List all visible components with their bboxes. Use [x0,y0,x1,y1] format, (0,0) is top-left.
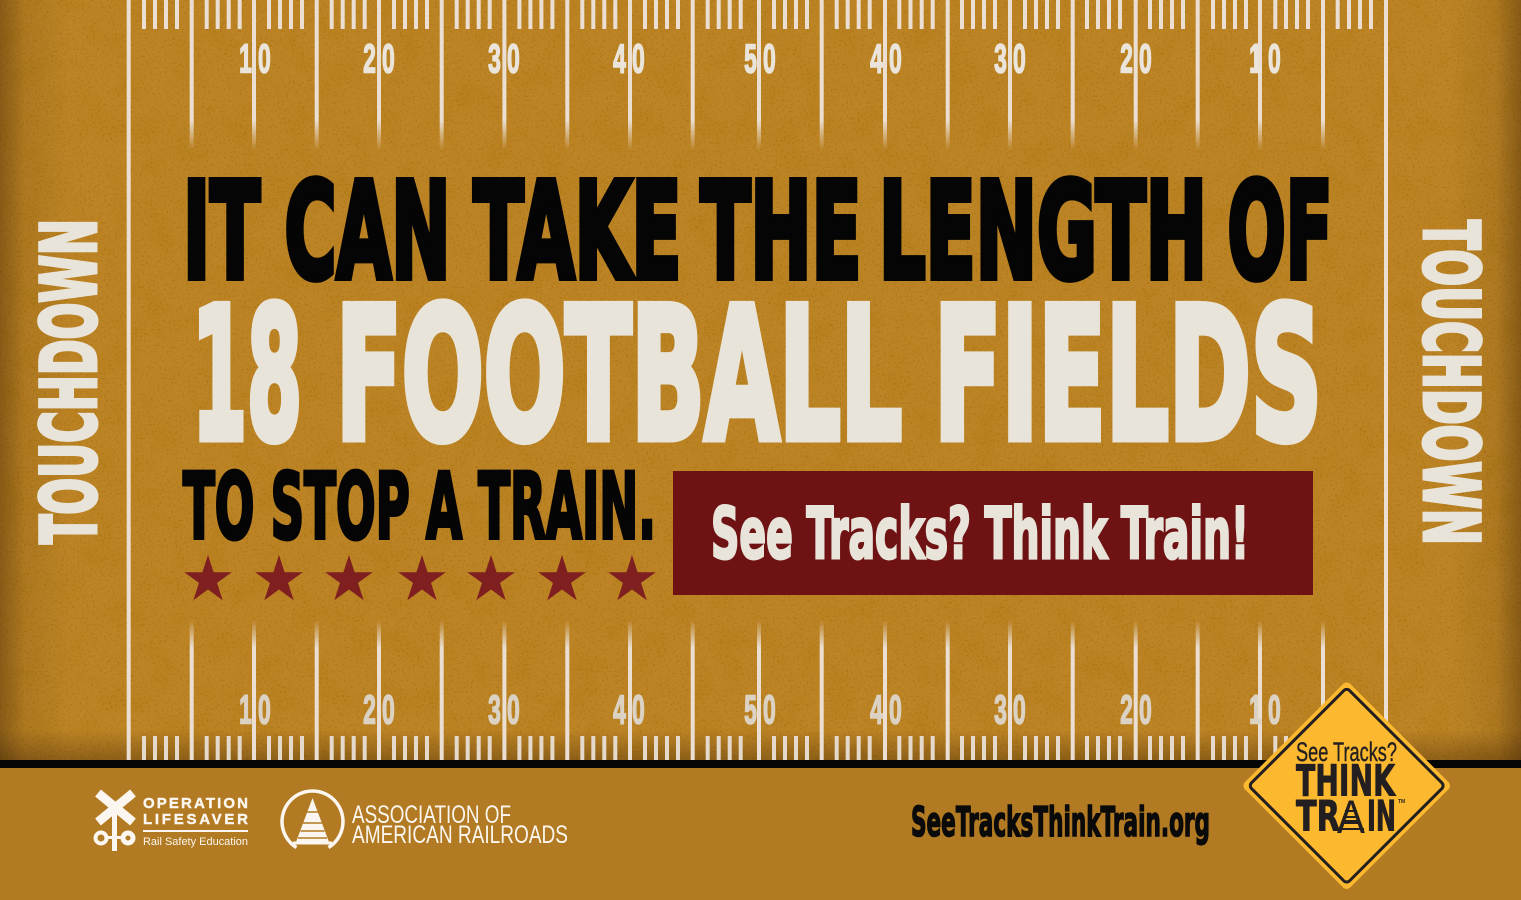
headline line 1 [183,156,1332,310]
bottom hash marks [144,736,1308,760]
top yard numbers: 10 [239,37,277,82]
sign wording [1296,737,1405,843]
sign wording: TR [1296,792,1340,840]
wordmark: AMERICAN RAILROADS [352,821,568,849]
top yard numbers: 40 [613,37,651,82]
headline line 2: FOOTBALL [336,269,902,481]
wordmark [143,795,248,848]
icon: track in circle [282,791,343,848]
top hash marks [144,0,1371,29]
website URL: SeeTracksThinkTrain.org [911,798,1210,846]
sign wording: See Tracks? [1296,737,1397,767]
headline line 1: OF [1228,156,1332,310]
bottom yard numbers: 40 [613,688,651,733]
headline line 3: TO STOP A TRAIN. [183,455,656,560]
bottom yard numbers: 20 [363,688,401,733]
callout: See Tracks? Think Train! [673,471,1313,595]
wordmark [352,801,568,849]
logo: Association of American Railroads [282,791,568,849]
bottom yard numbers: 10 [1249,688,1287,733]
wordmark: OPERATION [143,795,248,812]
wordmark: ASSOCIATION OF [352,801,511,829]
top yard numbers: 20 [1120,37,1158,82]
headline line 1: LENGTH [879,156,1207,310]
sign wording: IN [1367,792,1396,840]
headline line 1: CAN [284,156,450,310]
headline line 1: IT [183,156,260,310]
bottom yard numbers: 20 [1120,688,1158,733]
logo: Operation Lifesaver [96,793,248,851]
sign wording: TM [1398,799,1405,805]
icon: railroad crossbuck [96,793,133,851]
headline line 2: 18 [192,269,302,481]
bottom yard numbers: 50 [744,688,782,733]
top yard numbers: 30 [994,37,1032,82]
bottom yard numbers: 10 [239,688,277,733]
footer band [0,760,1521,900]
bottom yard lines [192,620,1323,760]
top yard numbers: 30 [488,37,526,82]
bottom yard numbers: 30 [994,688,1032,733]
top yard numbers: 40 [870,37,908,82]
top yard numbers: 20 [363,37,401,82]
row of stars [184,555,656,600]
bottom yard numbers: 30 [488,688,526,733]
end zone text: right TOUCHDOWN: TOUCHDOWN [1406,220,1496,545]
bottom yard numbers: 40 [870,688,908,733]
top yard numbers: 50 [744,37,782,82]
wordmark: Rail Safety Education [143,836,248,848]
wordmark: LIFESAVER [143,811,248,828]
field sidelines [129,0,1386,760]
headline line 1: TAKE [474,156,682,310]
icon: yellow warning diamond sign [1241,680,1452,891]
top yard lines [192,0,1323,150]
sign wording: THINK [1296,756,1396,806]
top yard numbers: 10 [1249,37,1287,82]
sign wording: A [1337,790,1366,843]
headline line 1: THE [700,156,862,310]
bottom yard numbers [239,688,1287,733]
top yard numbers [239,37,1287,82]
